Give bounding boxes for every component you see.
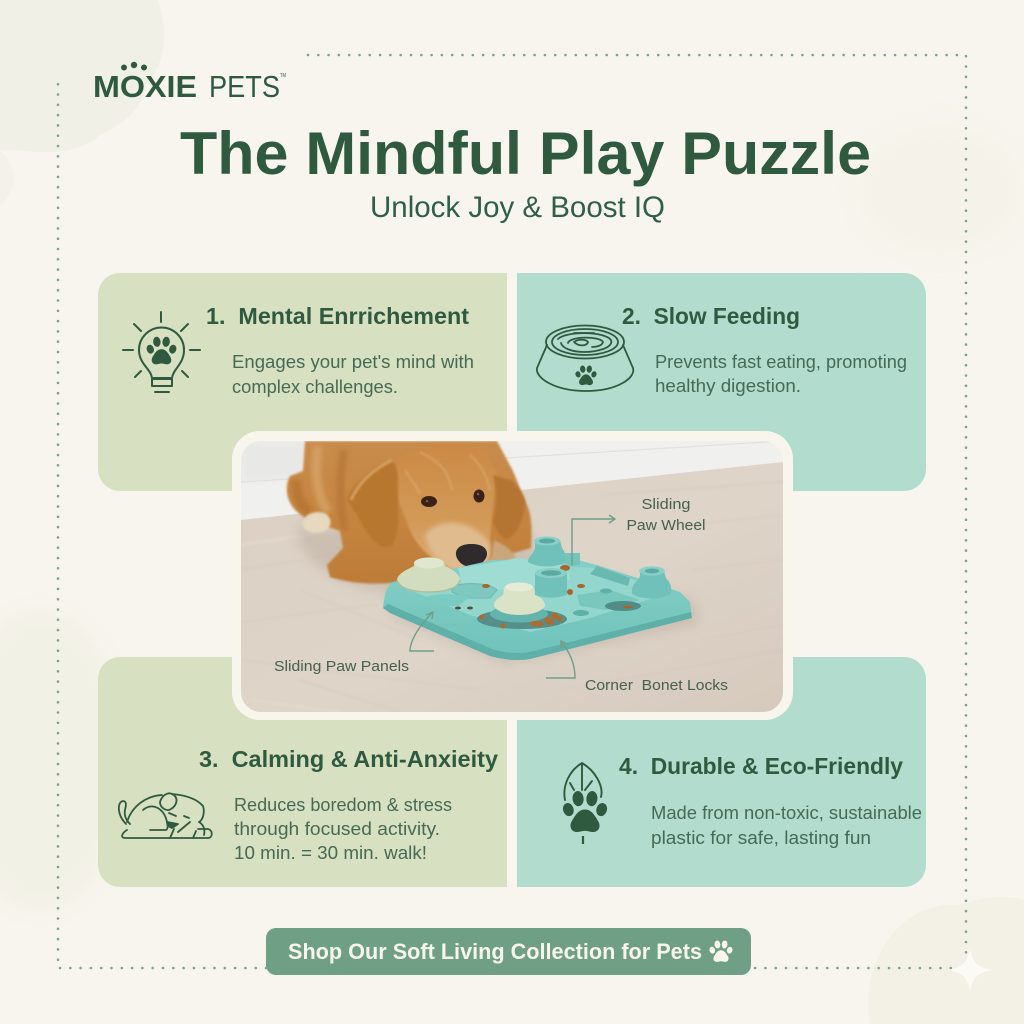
icon: leaf and paw (561, 763, 609, 844)
green button large (397, 558, 460, 592)
icon: sleeping dog (119, 793, 212, 838)
text: calming and anti-anxiety: Reduces boredom & stress (234, 795, 452, 815)
callout: sliding paw wheel: Paw Wheel (626, 518, 706, 534)
logo: Moxie Pets: TM (280, 73, 286, 79)
sparkle (947, 948, 993, 992)
callout: sliding paw panels: Sliding Paw Panels (274, 659, 409, 675)
tray wall (383, 558, 692, 660)
text: slow feeding (655, 352, 907, 396)
callout: sliding paw panels (274, 612, 434, 675)
kibble pieces (455, 565, 633, 610)
callout: sliding paw wheel: Sliding (642, 497, 690, 513)
dog nose (456, 544, 487, 567)
logo: Moxie Pets: MOXIE (93, 69, 197, 104)
teal tower back (528, 536, 580, 566)
callout: corner bonet locks (546, 641, 728, 694)
photo: dog with puzzle toy (241, 441, 783, 712)
ear highlight (351, 460, 392, 500)
tray inner top (414, 567, 651, 632)
icon: light bulb with paw (123, 312, 200, 392)
title: The Mindful Play Puzzle (180, 120, 871, 187)
panel 1: mental enrichment (98, 273, 507, 491)
call-to-action button (266, 928, 751, 975)
dog chin fur (490, 540, 516, 560)
panel 4: durable and eco-friendly (517, 657, 926, 887)
text: mental enrichment: Engages your pet's mind with (232, 352, 474, 372)
text: slow feeding: Prevents fast eating, promoting (655, 352, 907, 372)
text: mental enrichment (232, 352, 474, 397)
puzzle tray (383, 536, 692, 660)
subtitle: Unlock Joy & Boost IQ (370, 191, 665, 224)
green button small (490, 582, 548, 622)
dotted border frame (58, 55, 966, 968)
panel 2: slow feeding (517, 273, 926, 491)
text: calming and anti-anxiety: through focused activity. (234, 819, 440, 839)
dog eyes (421, 490, 484, 507)
teal tower centre (535, 568, 567, 598)
icon: maze feeding bowl (537, 326, 633, 391)
panel 3: calming and anti-anxiety (98, 657, 507, 887)
dog muzzle (425, 523, 490, 573)
round openings (425, 588, 641, 616)
callout: corner bonet locks: Corner Bonet Locks (585, 678, 728, 694)
text: durable and eco-friendly (651, 803, 922, 848)
heading: slow feeding: 2. Slow Feeding (622, 303, 800, 329)
dog head (398, 478, 494, 564)
floor wood grain (241, 482, 783, 712)
text: calming and anti-anxiety: 10 min. = 30 min. walk! (234, 843, 427, 863)
icon: white paw (709, 940, 733, 962)
heading: mental enrichment: 1. Mental Enrrichement (206, 303, 469, 329)
dog (287, 441, 532, 584)
back panels (458, 558, 570, 590)
heading: calming and anti-anxiety: 3. Calming & Anti-Anxieity (199, 746, 498, 772)
text: slow feeding: healthy digestion. (655, 376, 801, 396)
text: mental enrichment: complex challenges. (232, 377, 398, 397)
wall and baseboard (241, 441, 783, 712)
food well (477, 609, 567, 629)
tray and dog shadow (297, 525, 698, 664)
dog right ear (493, 475, 525, 539)
logo: Moxie Pets: PETS (209, 69, 280, 104)
text: durable and eco-friendly: Made from non-toxic, sustainable (651, 803, 922, 823)
logo: Moxie Pets (93, 62, 286, 104)
teal tower right (632, 566, 671, 598)
callout: sliding paw wheel (572, 497, 706, 565)
photo frame (232, 431, 793, 720)
dog left ear (348, 460, 398, 547)
tray lower lip (383, 604, 692, 660)
call-to-action button: Shop Our Soft Living Collection for Pets (288, 939, 702, 964)
dog shoulder fur (296, 446, 345, 530)
heading: durable and eco-friendly: 4. Durable & Eco-Friendly (619, 753, 903, 779)
fur highlights (405, 452, 490, 494)
dog body (287, 441, 532, 584)
text: calming and anti-anxiety (234, 795, 452, 863)
dog paw (303, 512, 331, 533)
text: durable and eco-friendly: plastic for safe, lasting fun (651, 828, 871, 848)
